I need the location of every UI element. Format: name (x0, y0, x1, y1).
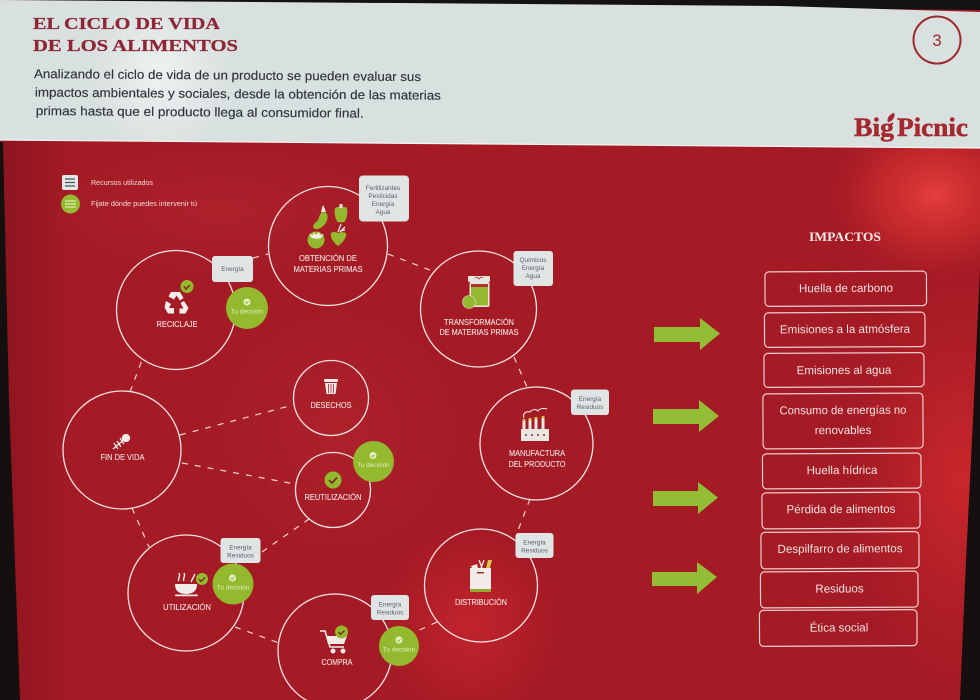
title: DE LOS ALIMENTOS (33, 36, 238, 55)
logo: Big Picnic: Big (854, 113, 894, 142)
icon: shopping cart (320, 626, 348, 654)
intro text (34, 67, 441, 121)
legend (61, 175, 197, 214)
legend: Fijate dónde puedes intervenir tú (91, 201, 197, 208)
resource tag: Energía (579, 396, 602, 403)
resource tag: Energía (523, 540, 546, 546)
header panel (0, 0, 980, 155)
resource tag: Residuos (227, 552, 254, 560)
logo: Big Picnic (854, 113, 968, 142)
impacts heading: IMPACTOS (809, 230, 881, 244)
icon: trash can (324, 379, 338, 394)
icon: recycle (164, 292, 188, 314)
stage: reciclaje (116, 250, 268, 370)
page number badge: 3 (932, 31, 942, 50)
resource tag (514, 251, 553, 286)
logo: Big Picnic: Picnic (897, 113, 968, 142)
label: RECICLAJE (156, 319, 198, 329)
resource tag: Residuos (377, 610, 403, 616)
resource tag (371, 595, 409, 620)
stage: distribución (424, 529, 554, 642)
check mark (324, 472, 342, 488)
check mark (180, 280, 194, 293)
impact: consumo de energías no renovables: Consumo de energías no (779, 404, 906, 417)
stage: compra (278, 594, 419, 700)
icon: grocery bag (470, 560, 492, 592)
arrow 2 (653, 400, 719, 432)
impact: consumo de energías no renovables (763, 393, 923, 449)
impact: despilfarro de alimentos (761, 532, 919, 569)
intro text: primas hasta que el producto llega al consumidor final. (36, 104, 364, 121)
resource tag (220, 538, 260, 563)
impact: consumo de energías no renovables: renovables (815, 424, 872, 437)
impact: emisiones al agua: Emisiones al agua (797, 364, 892, 377)
stage: manufactura (480, 387, 609, 500)
resource tag: Energía (221, 266, 244, 273)
resource tag: Energía (522, 265, 545, 272)
intro text: Analizando el ciclo de vida de un producto se pueden evaluar sus (34, 67, 421, 84)
resource tag: Energía (229, 544, 252, 552)
label: TRANSFORMACIÓN (444, 317, 514, 327)
cycle connectors (130, 254, 530, 643)
resource tag: Residuos (521, 548, 548, 554)
arrow 4 (652, 562, 717, 594)
decision badge: Tu decisión (217, 584, 250, 592)
impact: ética social (759, 610, 917, 646)
stage: desechos (294, 360, 368, 436)
resource tag: Pesticidas (368, 193, 398, 200)
decision badge (226, 287, 268, 329)
resource tag: Fertilizantes (366, 185, 400, 192)
label (294, 253, 363, 274)
label: DE MATERIAS PRIMAS (440, 327, 519, 337)
label: COMPRA (322, 657, 353, 667)
label: DESECHOS (310, 400, 352, 410)
label: REUTILIZACIÓN (304, 492, 362, 502)
resource tag (212, 256, 253, 282)
impact: huella de carbono (765, 271, 927, 306)
resource tag (571, 390, 609, 415)
decision badge (379, 626, 419, 666)
title (33, 14, 238, 55)
decision badge: Tu decisión (383, 646, 416, 654)
impact: pérdida de alimentos: Pérdida de alimentos (787, 503, 896, 516)
resource tag: Químicos (520, 257, 546, 264)
label: MANUFACTURA (509, 448, 565, 458)
impact: pérdida de alimentos (762, 492, 920, 529)
impact: residuos: Residuos (815, 582, 864, 596)
stage: obtención de materias primas (268, 176, 409, 306)
arrow 1 (654, 318, 720, 350)
impact: huella de carbono: Huella de carbono (799, 282, 893, 295)
impact: despilfarro de alimentos: Despilfarro de alimentos (777, 542, 903, 556)
label (508, 448, 566, 469)
resource tag: Agua (376, 209, 391, 216)
resource tag: Residuos (577, 404, 603, 411)
icon: fish bone (113, 434, 130, 449)
label: DISTRIBUCIÓN (455, 597, 507, 607)
stage: fin de vida (63, 391, 181, 509)
resource tag: Energía (372, 201, 395, 208)
resource tag: Energía (379, 602, 402, 608)
resource tag (516, 533, 554, 558)
stage: reutilización (296, 441, 394, 528)
icon: factory (521, 408, 549, 441)
resource tag: Agua (526, 273, 541, 280)
label: FIN DE VIDA (100, 452, 145, 462)
title: EL CICLO DE VIDA (33, 14, 221, 33)
label (440, 317, 519, 337)
label: UTILIZACIÓN (163, 602, 211, 612)
label: OBTENCIÓN DE (299, 253, 357, 263)
intro text: impactos ambientales y sociales, desde la obtención de las materias (35, 86, 441, 103)
impact: emisiones a la atmósfera (764, 312, 925, 347)
resource tag (359, 176, 409, 222)
arrow 3 (653, 482, 718, 514)
impact: emisiones a la atmósfera: Emisiones a la atmósfera (780, 323, 911, 336)
impact: emisiones al agua (764, 353, 924, 387)
stage: utilización (128, 535, 260, 651)
impacts list (759, 271, 927, 646)
page number badge (914, 16, 960, 64)
label: MATERIAS PRIMAS (294, 264, 363, 274)
decision badge: Tu decisión (357, 462, 390, 469)
impact: ética social: Ética social (810, 621, 868, 635)
impact: residuos (760, 571, 918, 608)
decision badge: Tu decisión (231, 308, 264, 316)
icon: soup bowl (175, 573, 208, 596)
icon: jam jar (462, 276, 490, 308)
stage: transformación (420, 251, 553, 367)
impact: huella hídrica (762, 453, 921, 489)
legend: Recursos utilizados (91, 180, 154, 187)
label: DEL PRODUCTO (508, 459, 566, 469)
icon: vegetables (308, 204, 347, 248)
impact: huella hídrica: Huella hídrica (807, 464, 878, 477)
